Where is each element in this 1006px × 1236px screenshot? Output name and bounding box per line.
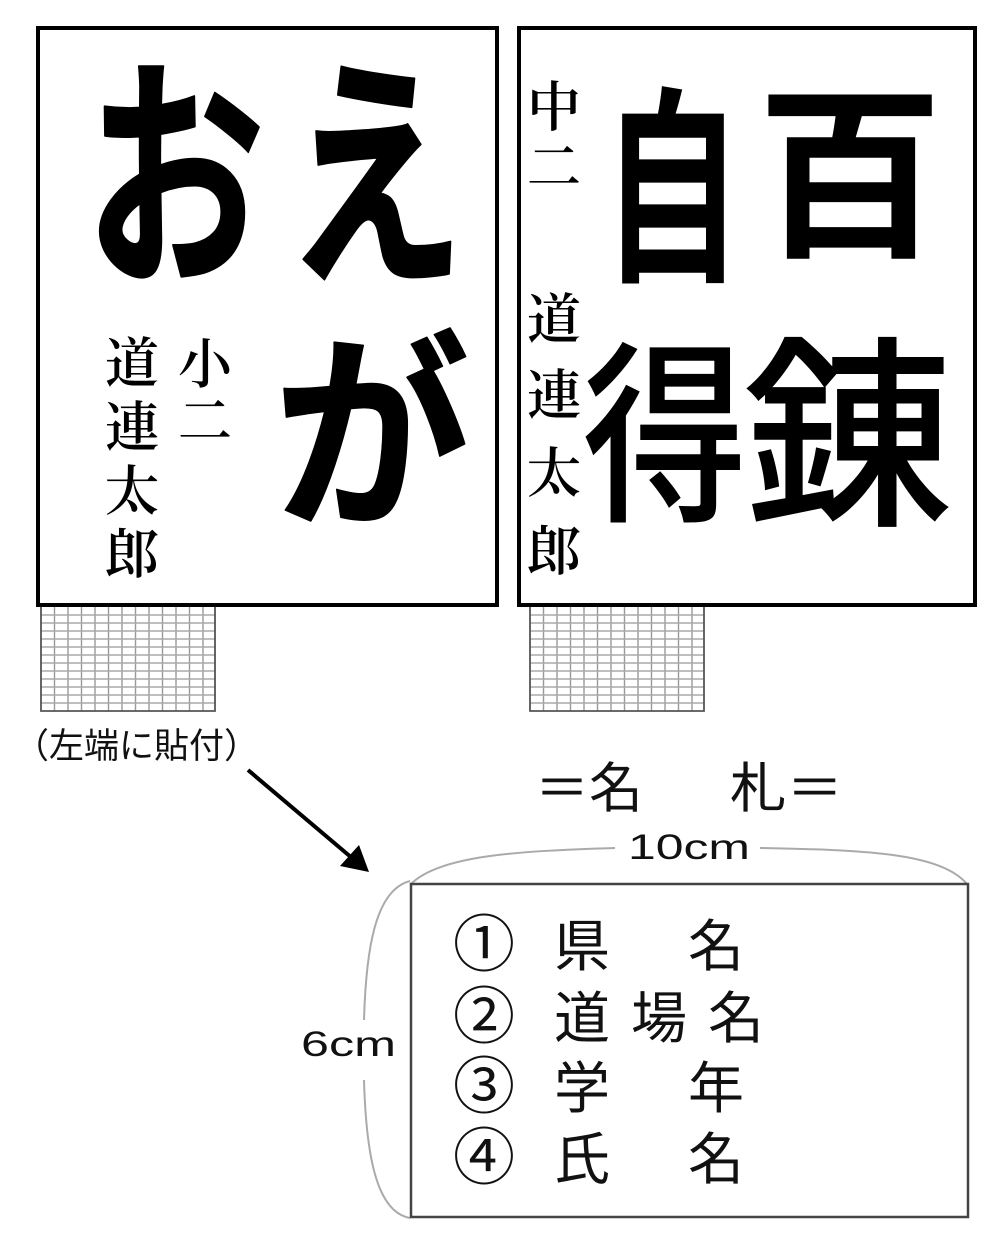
- list: name tag items: ②: [453, 983, 515, 1052]
- text: name 道連太郎 right: [527, 290, 581, 582]
- text: grade 小二: [178, 335, 235, 452]
- calligraphy: 百錬自得: 自: [602, 74, 742, 310]
- calligraphy: おえが: お: [85, 43, 265, 318]
- list: name tag items: ①: [453, 911, 515, 980]
- text: name 道連太郎: 太: [105, 462, 159, 522]
- panel: name tag specification: [411, 884, 968, 1217]
- text: name 道連太郎 right: 連: [527, 366, 581, 426]
- heading: 名札 second part: 札＝: [730, 759, 843, 819]
- label: 6cm: 6cm: [301, 1025, 396, 1064]
- calligraphy: 百錬自得: 得: [582, 330, 748, 548]
- list: name tag items: 氏: [554, 1128, 610, 1191]
- list: name tag items: 名: [688, 1128, 744, 1191]
- text: name 道連太郎: 道: [105, 334, 159, 394]
- caption: 左端に貼付: （左端に貼付）: [14, 727, 259, 766]
- heading: 名札: ＝名: [535, 759, 643, 819]
- grid patch: right name tag: [530, 607, 704, 711]
- list: name tag items: 場: [631, 987, 687, 1050]
- text: grade 小二: 二: [178, 392, 232, 452]
- calligraphy: おえが: [85, 43, 470, 554]
- text: grade 小二: 小: [178, 335, 235, 395]
- list: name tag items: 学: [554, 1057, 610, 1120]
- list: name tag items: ④: [453, 1124, 515, 1193]
- calligraphy: 百錬自得: 錬: [743, 324, 953, 553]
- calligraphy: 百錬自得: 百: [758, 76, 942, 282]
- list: name tag items: ③: [453, 1053, 515, 1122]
- label: 10cm: 10cm: [628, 828, 750, 867]
- dimension: 10cm width: [411, 828, 967, 884]
- text: name 道連太郎 right: 郎: [527, 522, 581, 582]
- list: name tag items: 名: [688, 915, 744, 978]
- list: name tag items: [453, 911, 764, 1193]
- text: grade 中二: [527, 78, 581, 198]
- panel: left calligraphy sheet: [38, 28, 497, 605]
- text: name 道連太郎 right: 道: [527, 290, 581, 350]
- list: name tag items: 名: [708, 987, 764, 1050]
- text: grade 中二: 中: [527, 78, 581, 138]
- panel: right calligraphy sheet: [519, 28, 975, 605]
- calligraphy: おえが: が: [274, 320, 470, 554]
- arrow: caption to name tag: [248, 770, 369, 872]
- text: name 道連太郎: [105, 334, 159, 585]
- list: name tag items: 県: [554, 915, 610, 978]
- text: grade 中二: 二: [527, 138, 581, 198]
- text: name 道連太郎: 連: [105, 398, 159, 458]
- dimension: 6cm height: [301, 881, 410, 1218]
- text: name 道連太郎 right: 太: [527, 444, 581, 504]
- calligraphy: おえが: え: [285, 43, 465, 318]
- grid patch: left name tag: [41, 607, 215, 711]
- list: name tag items: 年: [688, 1057, 744, 1120]
- list: name tag items: 道: [554, 987, 610, 1050]
- calligraphy: 百錬自得: [582, 74, 953, 553]
- text: name 道連太郎: 郎: [105, 525, 159, 585]
